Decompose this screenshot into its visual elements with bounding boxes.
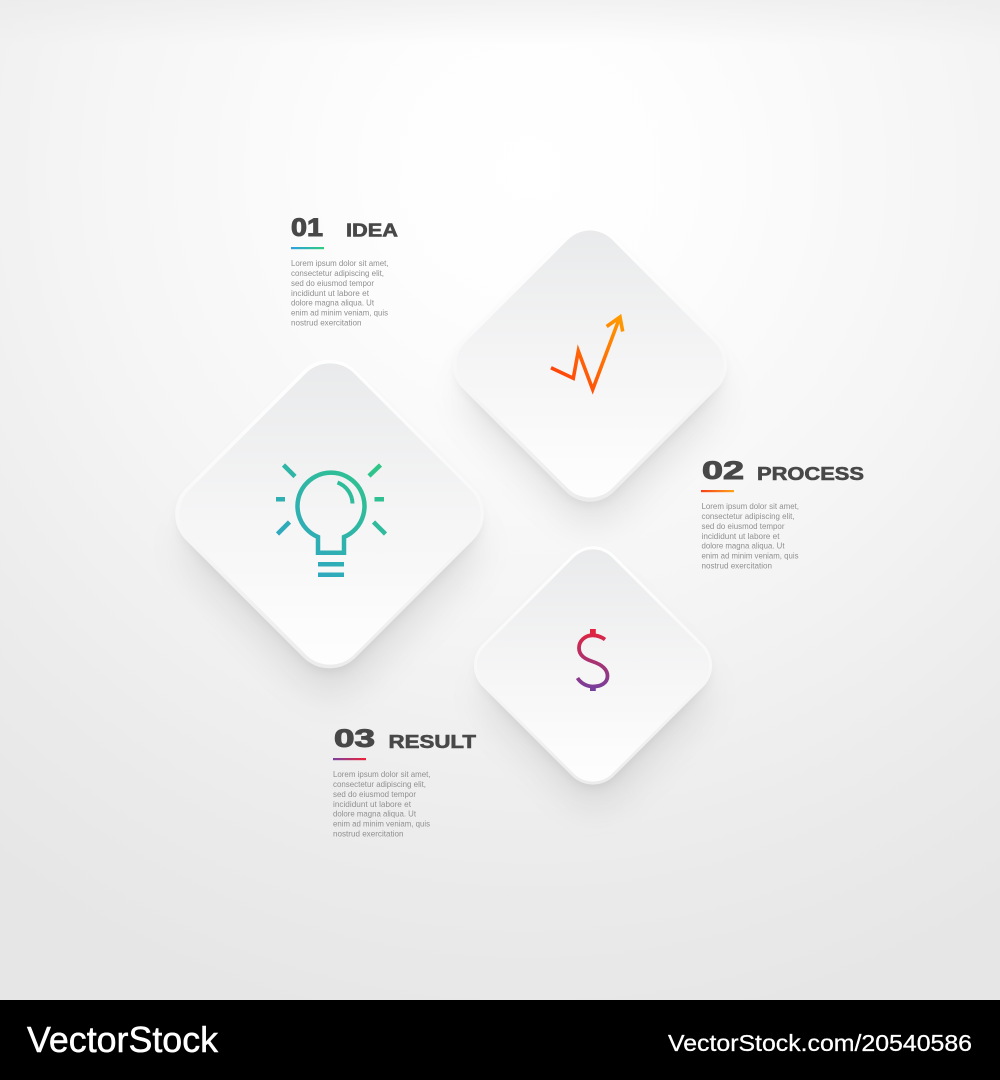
description: consectetur adipiscing elit, — [333, 779, 426, 789]
description: nostrud exercitation — [333, 828, 404, 838]
number 03: 03 — [334, 725, 375, 753]
description — [291, 258, 388, 327]
watermark footer bar — [0, 1000, 1000, 1080]
description: incididunt ut labore et — [291, 288, 370, 298]
watermark logo text: VectorStock — [27, 1019, 219, 1060]
description — [702, 501, 799, 570]
description: enim ad minim veniam, quis — [291, 308, 388, 318]
description: enim ad minim veniam, quis — [333, 819, 430, 829]
description: dolore magna aliqua. Ut — [702, 541, 785, 551]
description: dolore magna aliqua. Ut — [291, 298, 375, 308]
description: nostrud exercitation — [702, 560, 772, 570]
description: incididunt ut labore et — [333, 799, 412, 809]
description: Lorem ipsum dolor sit amet, — [333, 769, 430, 779]
description: incididunt ut labore et — [702, 531, 780, 541]
description: enim ad minim veniam, quis — [702, 551, 798, 561]
description: dolore magna aliqua. Ut — [333, 809, 417, 819]
description: consectetur adipiscing elit, — [291, 268, 384, 278]
text block: 02 process — [701, 457, 864, 570]
accent underline — [701, 490, 734, 492]
label result: RESULT — [388, 732, 476, 752]
panel: result diamond — [461, 534, 725, 816]
panel: idea diamond — [160, 344, 499, 706]
icon: rising arrow — [551, 317, 623, 390]
icon: light bulb — [276, 465, 386, 575]
text block: 03 result — [333, 725, 476, 838]
panel: process diamond — [439, 213, 741, 535]
description: consectetur adipiscing elit, — [702, 511, 794, 521]
description — [333, 769, 430, 838]
icon: dollar sign — [578, 629, 608, 691]
label process: PROCESS — [757, 464, 864, 484]
accent underline — [333, 758, 366, 760]
description: sed do eiusmod tempor — [702, 521, 785, 531]
watermark image id: VectorStock.com/20540586 — [668, 1030, 972, 1056]
accent underline — [291, 247, 324, 249]
text block: 01 idea — [291, 214, 398, 327]
description: Lorem ipsum dolor sit amet, — [702, 501, 799, 511]
number 02: 02 — [702, 457, 744, 485]
description: Lorem ipsum dolor sit amet, — [291, 258, 388, 268]
description: sed do eiusmod tempor — [333, 789, 416, 799]
description: nostrud exercitation — [291, 317, 362, 327]
description: sed do eiusmod tempor — [291, 278, 374, 288]
label idea: IDEA — [346, 220, 398, 240]
number 01: 01 — [291, 214, 323, 242]
